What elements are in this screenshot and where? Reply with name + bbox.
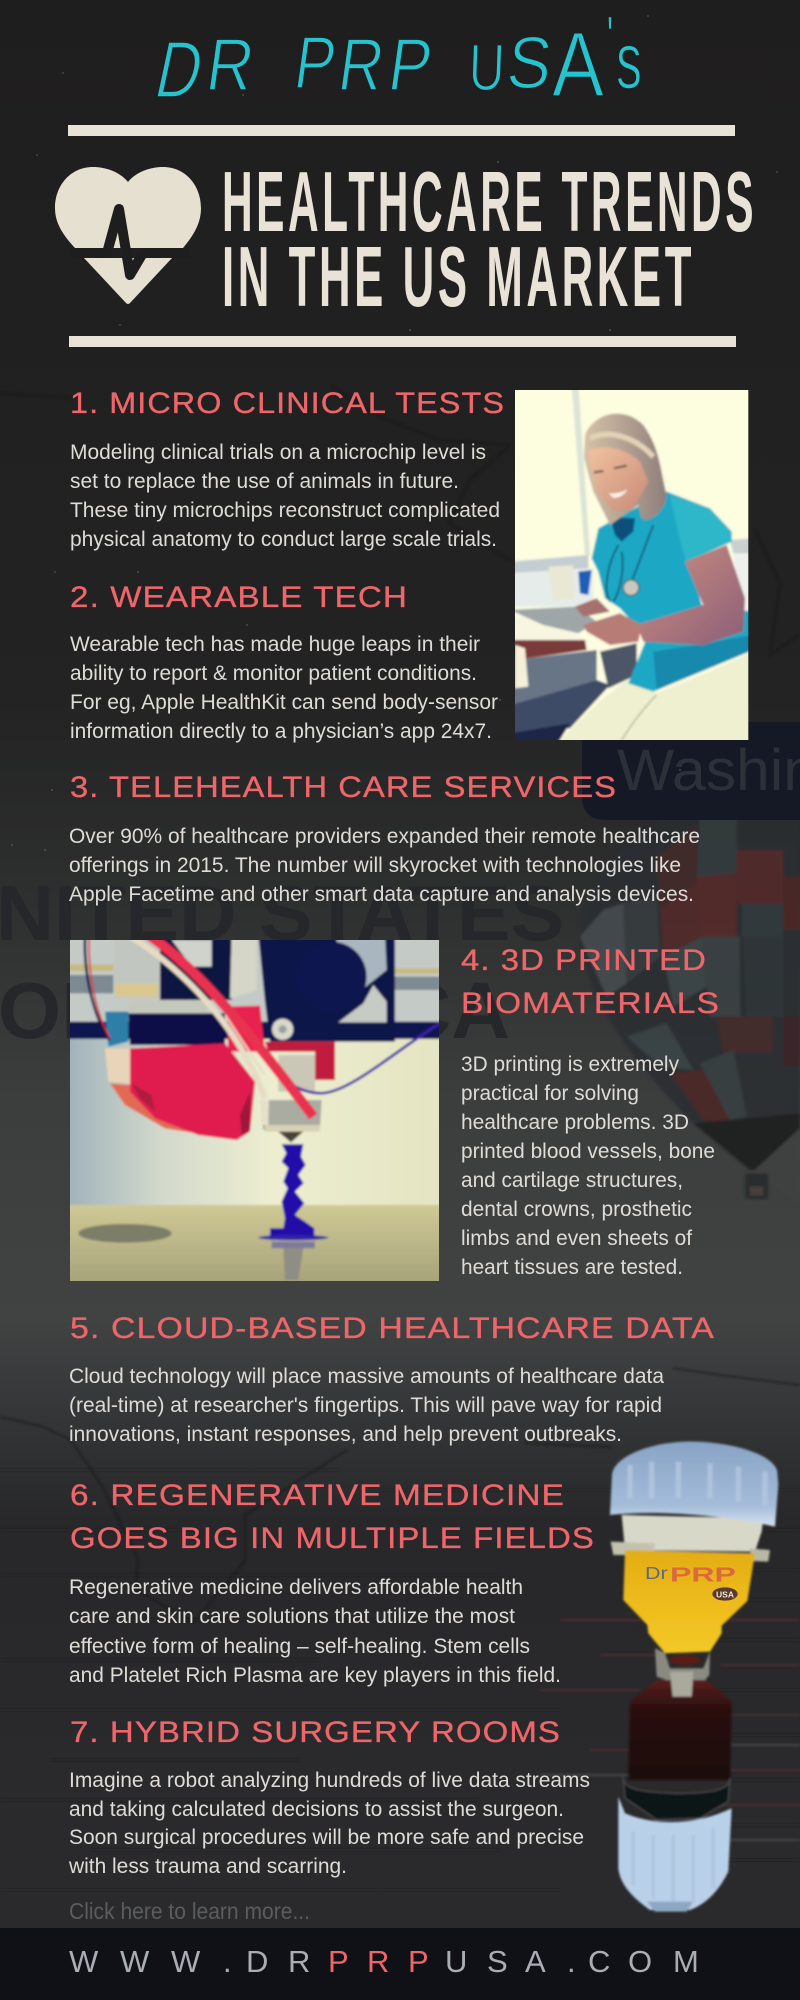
footer website: . xyxy=(567,1944,576,1979)
section 1: physical anatomy to conduct large scale trials. xyxy=(70,527,497,551)
photo: 3D printer xyxy=(65,935,445,1285)
section 4: BIOMATERIALS xyxy=(461,987,720,1020)
section 1 xyxy=(70,387,505,551)
footer website: P xyxy=(408,1944,429,1979)
section 6: 6. REGENERATIVE MEDICINE xyxy=(70,1479,565,1512)
footer website: C xyxy=(588,1944,610,1979)
section 2: For eg, Apple HealthKit can send body-sensor xyxy=(70,690,498,714)
footer website: . xyxy=(223,1944,232,1979)
footer website: O xyxy=(628,1944,652,1979)
footer website: A xyxy=(525,1944,546,1979)
section 1: 1. MICRO CLINICAL TESTS xyxy=(70,387,505,420)
section 6: and Platelet Rich Plasma are key players in this field. xyxy=(69,1663,561,1687)
ghost text: United States of America: NITED STATES xyxy=(0,869,564,957)
section 4: and cartilage structures, xyxy=(461,1168,683,1192)
section 3: 3. TELEHEALTH CARE SERVICES xyxy=(70,771,617,804)
section 4: limbs and even sheets of xyxy=(461,1226,692,1250)
section 5: 5. CLOUD-BASED HEALTHCARE DATA xyxy=(70,1312,715,1345)
section 2: ability to report & monitor patient conditions. xyxy=(70,661,477,685)
section 6 xyxy=(69,1479,595,1687)
section 4: heart tissues are tested. xyxy=(461,1255,683,1279)
section 7: Soon surgical procedures will be more safe and precise xyxy=(69,1825,584,1849)
section 4: healthcare problems. 3D xyxy=(461,1110,689,1134)
section 1: set to replace the use of animals in future. xyxy=(70,469,459,493)
handwritten title: U xyxy=(468,30,506,104)
section 3: Over 90% of healthcare providers expanded their remote healthcare xyxy=(69,824,700,848)
handwritten title: R xyxy=(334,23,389,106)
footer website: P xyxy=(328,1944,349,1979)
footer website: W xyxy=(171,1944,201,1979)
section 4: 3D printing is extremely xyxy=(461,1052,679,1076)
section 6: Regenerative medicine delivers affordable health xyxy=(69,1575,523,1599)
handwritten title: D xyxy=(148,26,211,115)
tube logo: PRP xyxy=(670,1564,736,1587)
starry specks xyxy=(11,15,778,851)
section 7 xyxy=(68,1716,590,1878)
footer website: U xyxy=(445,1944,467,1979)
footer website: W xyxy=(69,1944,99,1979)
hot air balloon xyxy=(580,805,800,1203)
tube logo xyxy=(645,1563,738,1601)
section 7: Imagine a robot analyzing hundreds of live data streams xyxy=(69,1768,590,1792)
section 6: care and skin care solutions that utilize the most xyxy=(69,1604,515,1628)
handwritten title: S xyxy=(503,21,556,104)
handwritten title: s xyxy=(616,16,642,105)
section 1: These tiny microchips reconstruct complicated xyxy=(70,498,500,522)
tube logo: Dr xyxy=(645,1563,668,1583)
footer website: D xyxy=(246,1944,268,1979)
tube logo: USA xyxy=(716,1589,735,1599)
footer website: W xyxy=(120,1944,150,1979)
section 1: Modeling clinical trials on a microchip level is xyxy=(70,440,486,464)
bottom rule xyxy=(69,336,736,347)
section 3: offerings in 2015. The number will skyrocket with technologies like xyxy=(69,853,681,877)
map outlines xyxy=(0,386,800,1622)
section 3: Apple Facetime and other smart data capture and analysis devices. xyxy=(69,882,694,906)
section 5: (real-time) at researcher's fingertips. This will pave way for rapid xyxy=(69,1393,662,1417)
section 4: practical for solving xyxy=(461,1081,639,1105)
section 4 xyxy=(461,944,720,1279)
top rule xyxy=(68,125,735,136)
PRP tube product xyxy=(610,1442,778,1912)
section 5: innovations, instant responses, and help prevent outbreaks. xyxy=(69,1422,622,1446)
footer website: M xyxy=(673,1944,699,1979)
footer website: R xyxy=(288,1944,310,1979)
section 6: effective form of healing – self-healing. Stem cells xyxy=(69,1634,530,1658)
section 2 xyxy=(70,581,498,743)
section 6: GOES BIG IN MULTIPLE FIELDS xyxy=(70,1522,595,1555)
handwritten title: P xyxy=(384,23,437,106)
water streaks xyxy=(0,1470,800,1890)
section 5 xyxy=(69,1312,715,1446)
handwritten title xyxy=(148,4,642,116)
handwritten title: ' xyxy=(606,4,614,71)
ghost text: United States of America xyxy=(0,869,564,1055)
footer band xyxy=(0,1928,800,2000)
handwritten title: A xyxy=(552,14,605,116)
section 2: Wearable tech has made huge leaps in their xyxy=(70,632,480,656)
section 3 xyxy=(69,771,700,906)
section 4: printed blood vessels, bone xyxy=(461,1139,715,1163)
main title xyxy=(222,155,757,325)
link: click here to learn more: Click here to learn more... xyxy=(69,1898,310,1924)
section 2: 2. WEARABLE TECH xyxy=(70,581,408,614)
footer website: R xyxy=(367,1944,389,1979)
section 2: information directly to a physician’s app 24x7. xyxy=(70,719,492,743)
section 4: 4. 3D PRINTED xyxy=(461,944,707,977)
section 4: dental crowns, prosthetic xyxy=(461,1197,692,1221)
handwritten title: R xyxy=(202,23,259,106)
section 5: Cloud technology will place massive amounts of healthcare data xyxy=(69,1364,664,1388)
section 7: with less trauma and scarring. xyxy=(68,1854,347,1878)
dark map label panel xyxy=(582,722,800,820)
footer website: S xyxy=(487,1944,508,1979)
photo: nurse with tablet xyxy=(510,385,753,745)
section 7: and taking calculated decisions to assist the surgeon. xyxy=(69,1797,564,1821)
ghost text: United States of America: OF AMERICA xyxy=(0,966,510,1055)
section 7: 7. HYBRID SURGERY ROOMS xyxy=(70,1716,561,1749)
handwritten title: P xyxy=(290,21,341,104)
icon: heart with pulse xyxy=(55,167,201,304)
